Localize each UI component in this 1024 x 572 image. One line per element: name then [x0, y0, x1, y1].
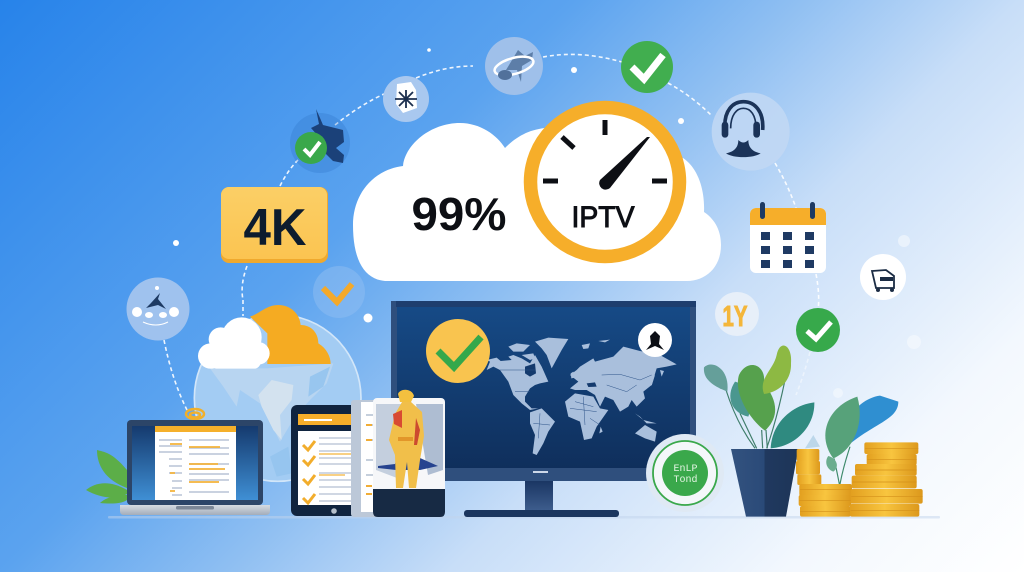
small decorative dots [173, 48, 921, 398]
icon: satellite badge [485, 37, 543, 95]
tablet [291, 405, 357, 516]
world map [487, 338, 677, 455]
main cloud [353, 123, 721, 281]
middle coin stack [799, 484, 852, 517]
green badge [646, 434, 724, 512]
icon: green check right [796, 308, 840, 352]
icon: cart badge [860, 254, 906, 300]
orange cloud [250, 305, 331, 364]
white cloud [198, 317, 270, 369]
badge text: Tond [674, 474, 698, 486]
gauge: IPTV [530, 108, 680, 256]
second plant [805, 396, 898, 484]
stems [726, 380, 785, 448]
icon: cross badge [383, 76, 429, 122]
gauge label: IPTV [572, 201, 634, 234]
icon: calendar [750, 202, 826, 273]
leaves beside laptop [86, 450, 127, 504]
dashed connection arc [164, 54, 819, 410]
badge: 4K [221, 187, 328, 263]
leaves [704, 364, 728, 392]
badge: 4K: 4K [244, 199, 307, 257]
globe with clouds [194, 305, 361, 481]
text: 99%: 99% [412, 188, 506, 240]
card with figure [373, 390, 445, 517]
icon: 1Y badge [715, 292, 759, 336]
plant and coin stacks [796, 396, 923, 517]
icon: cycling badge [126, 278, 190, 340]
icon: 1Y badge: 1Y [722, 301, 748, 333]
badge text [674, 463, 698, 486]
right coin stack [850, 442, 923, 517]
laptop page [155, 426, 236, 500]
potted plant [704, 345, 814, 517]
pot [731, 449, 798, 517]
icon: green check top [621, 41, 673, 93]
gauge needle [599, 137, 650, 190]
monitor with world map [391, 301, 696, 517]
map water and borders [500, 363, 652, 438]
check badge on monitor [426, 319, 490, 383]
left coin stack [796, 449, 821, 485]
document behind card [351, 400, 401, 517]
laptop [120, 409, 270, 515]
figure [378, 390, 438, 488]
globe [194, 315, 361, 481]
icon: green check with dark blob [290, 109, 350, 173]
location badge on monitor [638, 323, 672, 357]
icon: headset support agent [712, 93, 790, 171]
gauge ticks [543, 120, 667, 181]
wifi icon [186, 409, 204, 426]
icon: orange check [313, 266, 365, 318]
badge text: EnLP [674, 463, 698, 475]
